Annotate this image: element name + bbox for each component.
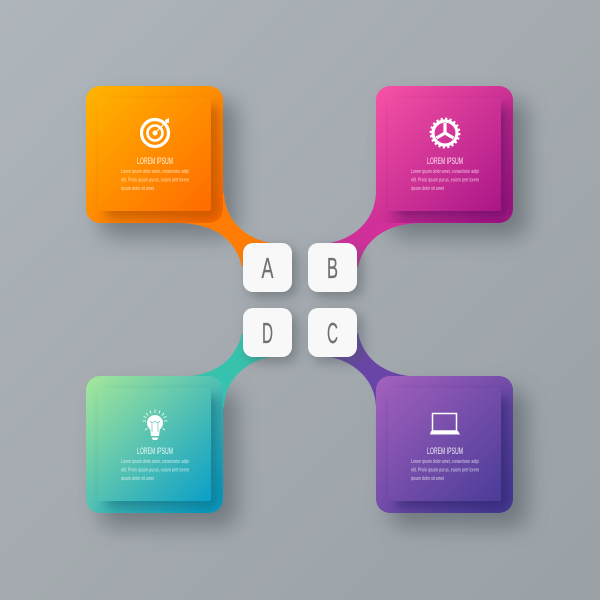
text: B: elit. Proin ipsum purus, euism pret lorem xyxy=(411,178,479,184)
button A: A xyxy=(262,253,274,285)
text: A xyxy=(121,156,189,192)
text: C: ipsum dolor sit amet xyxy=(411,476,444,482)
button A xyxy=(243,243,297,297)
icon: gear xyxy=(431,119,459,147)
text: C xyxy=(411,446,479,482)
button C xyxy=(308,308,362,362)
connector C xyxy=(330,333,420,407)
text: C: LOREM IPSUM xyxy=(427,446,463,456)
panel: B pink xyxy=(330,86,527,267)
text: A: ipsum dolor sit amet xyxy=(121,186,154,192)
text: C: elit. Proin ipsum purus, euism pret lorem xyxy=(411,468,479,474)
text: D: elit. Proin ipsum purus, euism pret lorem xyxy=(121,468,189,474)
button D: D xyxy=(262,318,273,350)
icon: target xyxy=(142,118,169,146)
text: A: Lorem ipsum dolor amet, consectetur adipi xyxy=(121,169,189,175)
text: A: elit. Proin ipsum purus, euism pret lorem xyxy=(121,178,189,184)
panel: A orange xyxy=(86,86,270,267)
connector D xyxy=(180,333,270,407)
text: B: LOREM IPSUM xyxy=(427,156,463,166)
connector B xyxy=(330,193,420,267)
connector A xyxy=(180,193,270,267)
button D xyxy=(243,308,297,362)
button B: B xyxy=(327,253,338,285)
button B xyxy=(308,243,362,297)
icon: bulb xyxy=(142,410,168,440)
text: D: ipsum dolor sit amet xyxy=(121,476,154,482)
text: D xyxy=(121,446,189,482)
text: D: Lorem ipsum dolor amet, consectetur adipi xyxy=(121,459,189,465)
icon: laptop xyxy=(430,414,460,434)
text: A: LOREM IPSUM xyxy=(137,156,173,166)
panel: C purple xyxy=(330,333,527,527)
button C: C xyxy=(327,318,338,350)
panel: D teal xyxy=(86,333,270,527)
text: D: LOREM IPSUM xyxy=(137,446,173,456)
text: B: ipsum dolor sit amet xyxy=(411,186,444,192)
text: B xyxy=(411,156,479,192)
text: B: Lorem ipsum dolor amet, consectetur adipi xyxy=(411,169,479,175)
text: C: Lorem ipsum dolor amet, consectetur adipi xyxy=(411,459,479,465)
